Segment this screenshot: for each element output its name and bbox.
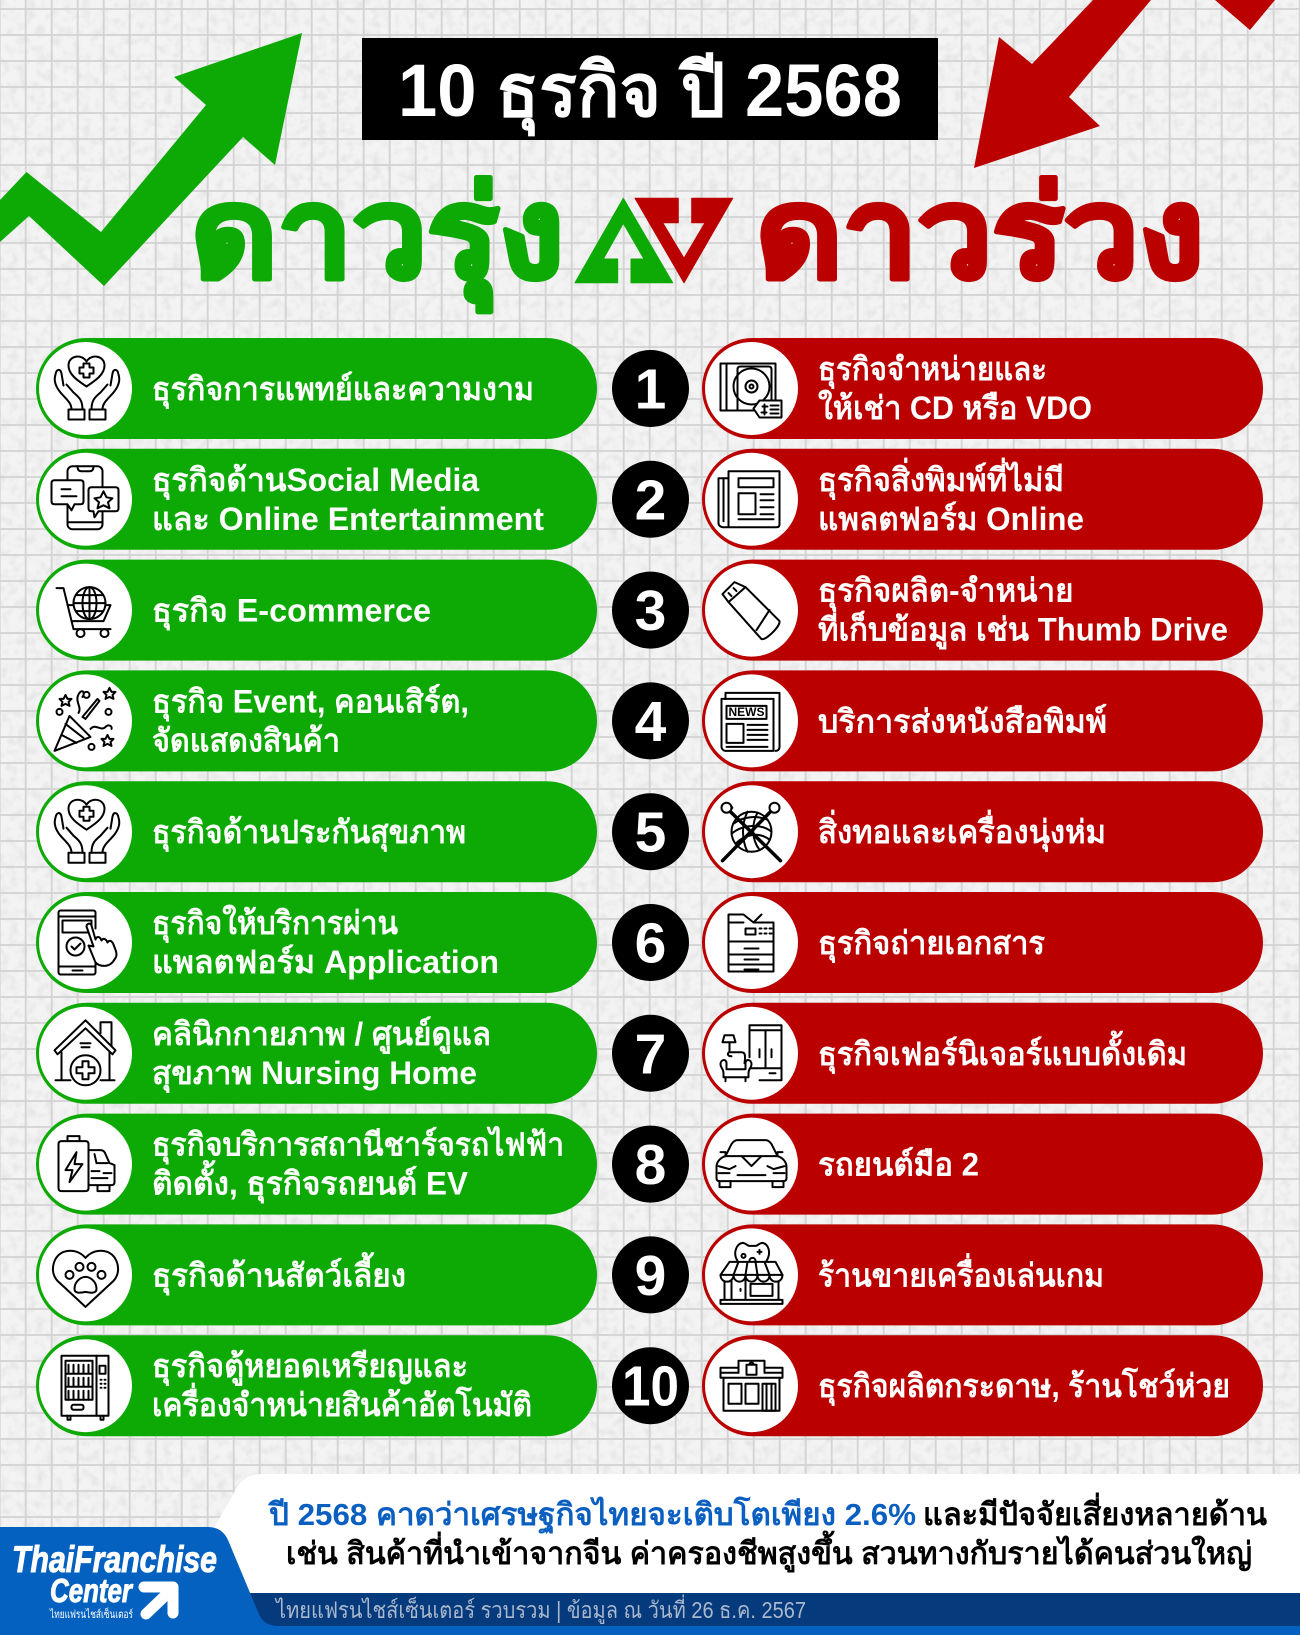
number 2 bbox=[612, 461, 689, 538]
number 5 bbox=[612, 793, 689, 870]
icon: yarn ball with needles bbox=[722, 803, 780, 861]
row 3 right: ที่เก็บข้อมูล เช่น Thumb Drive bbox=[818, 607, 1228, 651]
number 1 bbox=[612, 350, 689, 427]
icon: nursing home house bbox=[54, 1020, 116, 1085]
row 5 right: สิ่งทอและเครื่องนุ่งห่ม bbox=[818, 809, 1106, 853]
row 2 left bbox=[36, 449, 597, 550]
number 4 bbox=[612, 682, 689, 759]
number 7 bbox=[612, 1015, 689, 1092]
number 8 bbox=[612, 1126, 689, 1203]
icon: photocopier bbox=[728, 914, 774, 972]
logo block bbox=[0, 1527, 1300, 1635]
number 9 bbox=[612, 1236, 689, 1313]
summary line 1: และมีปัจจัยเสี่ยงหลายด้าน bbox=[923, 1492, 1267, 1532]
row 2 left: และ Online Entertainment bbox=[152, 501, 544, 537]
logo wordmark: ThaiFranchise bbox=[12, 1539, 217, 1580]
icon: medical care hands bbox=[55, 357, 119, 420]
row 7 left: คลินิกกายภาพ / ศูนย์ดูแล bbox=[152, 1016, 491, 1055]
row 6 left bbox=[36, 892, 597, 993]
summary line 2: เช่น สินค้าที่นำเข้าจากจีน ค่าครองชีพสูงขึ้น สวนทางกับรายได้คนส่วนใหญ่ bbox=[286, 1530, 1252, 1573]
icon: news paper bbox=[722, 693, 780, 751]
logo small Thai name: ไทยแฟรนไชส์เซ็นเตอร์ bbox=[49, 1607, 133, 1621]
row 3 left: ธุรกิจ E-commerce bbox=[152, 593, 431, 632]
icon: green rising arrow bbox=[0, 33, 302, 286]
icon: up and down triangles bbox=[575, 198, 733, 283]
number 3: 3 bbox=[635, 579, 666, 643]
icon: shopping cart with globe bbox=[56, 587, 110, 637]
row 1 right bbox=[702, 338, 1263, 439]
row 1 right: ให้เช่า CD หรือ VDO bbox=[818, 389, 1092, 426]
icon: sofa lamp and wardrobe bbox=[720, 1025, 782, 1081]
icon: USB thumb drive bbox=[722, 582, 780, 639]
row 9 right: ร้านขายเครื่องเล่นเกม bbox=[818, 1252, 1104, 1293]
icon: vending machine bbox=[62, 1356, 108, 1420]
row 7 left bbox=[36, 1003, 597, 1104]
icon: heart with paw bbox=[53, 1251, 118, 1307]
row 10 left: เครื่องจำหน่ายสินค้าอัตโนมัติ bbox=[152, 1382, 532, 1423]
number 8: 8 bbox=[635, 1133, 666, 1197]
row 8 right: รถยนต์มือ 2 bbox=[818, 1147, 979, 1183]
title: 10 ธุรกิจ ปี 2568 bbox=[398, 49, 902, 137]
icon: printed newspaper bbox=[718, 471, 780, 527]
row 10 right bbox=[702, 1335, 1263, 1436]
number 3 bbox=[612, 572, 689, 649]
row 8 left: ติดตั้ง, ธุรกิจรถยนต์ EV bbox=[152, 1160, 469, 1205]
icon: health insurance hands bbox=[55, 800, 119, 863]
row 10 right: ธุรกิจผลิตกระดาษ, ร้านโชว์ห่วย bbox=[818, 1367, 1230, 1407]
row 5 left: ธุรกิจด้านประกันสุขภาพ bbox=[152, 814, 466, 853]
icon: paper shop bbox=[720, 1361, 782, 1411]
row 5 right bbox=[702, 781, 1263, 882]
number 7: 7 bbox=[635, 1022, 666, 1086]
row 8 left bbox=[36, 1114, 597, 1215]
source strip: ไทยแฟรนไชส์เซ็นเตอร์ รวบรวม | ข้อมูล ณ วันที่ 26 ธ.ค. 2567 bbox=[274, 1594, 806, 1624]
number 10 bbox=[612, 1347, 689, 1424]
row 4 right: บริการส่งหนังสือพิมพ์ bbox=[818, 703, 1107, 739]
row 3 right: ธุรกิจผลิต-จำหน่าย bbox=[818, 573, 1074, 612]
row 1 left bbox=[36, 338, 597, 439]
icon: car front bbox=[716, 1140, 786, 1187]
icon: game shop bbox=[720, 1243, 782, 1304]
icon: logo arrow bbox=[144, 1587, 173, 1614]
footer summary panel bbox=[196, 1474, 1300, 1593]
number 5: 5 bbox=[635, 801, 666, 865]
row 8 left: ธุรกิจบริการสถานีชาร์จรถไฟฟ้า bbox=[152, 1126, 564, 1166]
number 9: 9 bbox=[635, 1244, 666, 1308]
icon: red falling arrow bbox=[974, 0, 1275, 168]
row 4 left: จัดแสดงสินค้า bbox=[152, 722, 340, 758]
row 6 left: ธุรกิจให้บริการผ่าน bbox=[152, 904, 398, 944]
row 2 right: แพลตฟอร์ม Online bbox=[818, 501, 1084, 537]
icon: phone with chat bubbles bbox=[52, 466, 118, 529]
row 7 left: สุขภาพ Nursing Home bbox=[152, 1055, 477, 1094]
row 9 left: ธุรกิจด้านสัตว์เลี้ยง bbox=[152, 1251, 406, 1296]
row 6 right bbox=[702, 892, 1263, 993]
row 4 left bbox=[36, 670, 597, 771]
row 1 left: ธุรกิจการแพทย์และความงาม bbox=[152, 371, 534, 410]
number 6 bbox=[612, 904, 689, 981]
row 5 left bbox=[36, 781, 597, 882]
row 2 left: ธุรกิจด้านSocial Media bbox=[152, 462, 479, 501]
number 6: 6 bbox=[635, 912, 666, 976]
icon: news paper: NEWS bbox=[728, 705, 764, 719]
row 2 right bbox=[702, 449, 1263, 550]
heading: rising stars: ดาวรุ่ง bbox=[191, 163, 564, 312]
row 10 left bbox=[36, 1335, 597, 1436]
row 7 right: ธุรกิจเฟอร์นิเจอร์แบบดั้งเดิม bbox=[818, 1030, 1187, 1075]
row 6 right: ธุรกิจถ่ายเอกสาร bbox=[818, 925, 1045, 964]
summary line 1 bbox=[268, 1492, 1267, 1535]
number 1: 1 bbox=[635, 358, 666, 422]
row 7 right bbox=[702, 1003, 1263, 1104]
row 1 right: ธุรกิจจำหน่ายและ bbox=[818, 351, 1047, 390]
number 2: 2 bbox=[635, 468, 666, 532]
number 10: 10 bbox=[622, 1355, 679, 1419]
icon: party popper bbox=[54, 688, 116, 751]
row 9 right bbox=[702, 1224, 1263, 1325]
icon: EV battery and car bbox=[58, 1136, 114, 1191]
row 8 right bbox=[702, 1114, 1263, 1215]
icon: CD case with price tag bbox=[720, 364, 782, 418]
heading: falling stars: ดาวร่วง bbox=[756, 163, 1204, 304]
icon: app platform tap bbox=[58, 910, 116, 974]
row 2 right: ธุรกิจสิ่งพิมพ์ที่ไม่มี bbox=[818, 457, 1064, 501]
logo wordmark bbox=[12, 1539, 217, 1609]
row 6 left: แพลตฟอร์ม Application bbox=[152, 944, 499, 980]
number 4: 4 bbox=[635, 690, 667, 754]
source strip bbox=[240, 1593, 1300, 1627]
row 4 right bbox=[702, 670, 1263, 771]
row 3 left bbox=[36, 560, 597, 661]
row 9 left bbox=[36, 1224, 597, 1325]
summary line 1: ปี 2568 คาดว่าเศรษฐกิจไทยจะเติบโตเพียง 2.6% bbox=[268, 1496, 916, 1535]
row 3 right bbox=[702, 560, 1263, 661]
row 10 left: ธุรกิจตู้หยอดเหรียญและ bbox=[152, 1348, 468, 1387]
row 4 left: ธุรกิจ Event, คอนเสิร์ต, bbox=[152, 683, 469, 722]
logo wordmark: Center bbox=[50, 1572, 134, 1609]
